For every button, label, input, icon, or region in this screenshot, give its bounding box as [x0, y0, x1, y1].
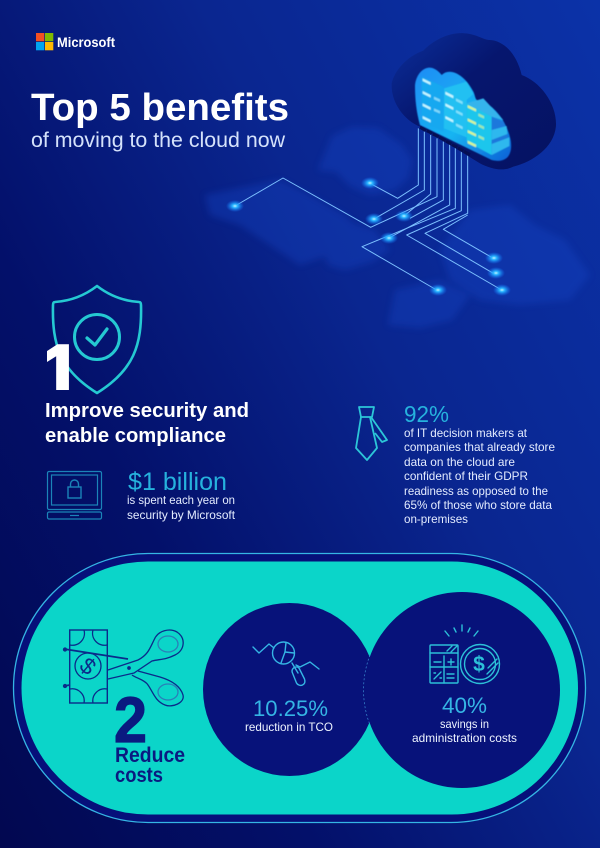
circle: 40% savings: 40% — [442, 693, 487, 718]
numeral 1: 1 — [39, 328, 82, 416]
stat: 92%: companies that already store — [404, 440, 555, 454]
icon: scissors cutting banknote: $ — [75, 652, 101, 680]
logo: Microsoft — [36, 33, 115, 50]
dark cloud body — [392, 33, 556, 169]
numeral 2 and heading: Reduce — [115, 744, 185, 767]
circle: 40% savings — [364, 592, 560, 788]
circle: 10.25% reduction in TCO — [203, 603, 376, 776]
panel: reduce costs — [14, 554, 586, 822]
icon: necktie — [356, 407, 387, 460]
circle: 10.25% reduction in TCO: 10.25% — [253, 696, 328, 721]
stat: 92%: data on the cloud are — [404, 455, 515, 469]
icon: laptop with padlock — [48, 472, 102, 519]
circle: 40% savings: savings in — [440, 717, 489, 731]
stat: 92%: 92% — [404, 401, 449, 427]
stat: 92%: of IT decision makers at — [404, 426, 528, 440]
title — [31, 87, 289, 152]
stat: $1 billion: is spent each year on — [127, 493, 235, 507]
numeral 2 and heading: costs — [115, 764, 163, 787]
title: of moving to the cloud now — [31, 128, 286, 152]
icon: scissors cutting banknote — [64, 630, 183, 706]
stat: 92%: 65% of those who store data — [404, 498, 552, 512]
logo: Microsoft: Microsoft — [57, 34, 115, 50]
illustration: cloud with servers and circuit lines — [235, 33, 556, 290]
numeral 2 and heading — [114, 684, 185, 787]
icon: magnifier over chart — [253, 642, 319, 685]
stat: $1 billion: security by Microsoft — [127, 508, 236, 522]
stat: $1 billion: $1 billion — [128, 468, 227, 496]
numeral 2 and heading: 2 — [114, 684, 147, 756]
circle: 10.25% reduction in TCO: reduction in TCO — [245, 720, 333, 734]
icon: calculator and coin — [430, 625, 500, 684]
circle: 40% savings: administration costs — [412, 731, 517, 745]
network nodes — [226, 177, 511, 296]
world map backdrop — [205, 127, 590, 328]
stat: $1 billion — [127, 468, 236, 522]
lit cloud interior with server racks — [415, 68, 511, 161]
connector pins — [420, 127, 470, 155]
overlap edge of the two circles — [364, 655, 370, 725]
icon: shield with check — [53, 286, 141, 393]
circuit lines — [235, 128, 502, 290]
heading: improve security: Improve security and — [45, 400, 249, 422]
stat: 92%: readiness as opposed to the — [404, 484, 548, 498]
heading: improve security — [45, 400, 249, 447]
icon: calculator and coin: $ — [473, 653, 485, 676]
heading: improve security: enable compliance — [45, 425, 226, 447]
stat: 92%: on-premises — [404, 512, 468, 526]
stat: 92% — [404, 401, 555, 526]
title: Top 5 benefits — [31, 87, 289, 129]
stat: 92%: confident of their GDPR — [404, 469, 528, 483]
